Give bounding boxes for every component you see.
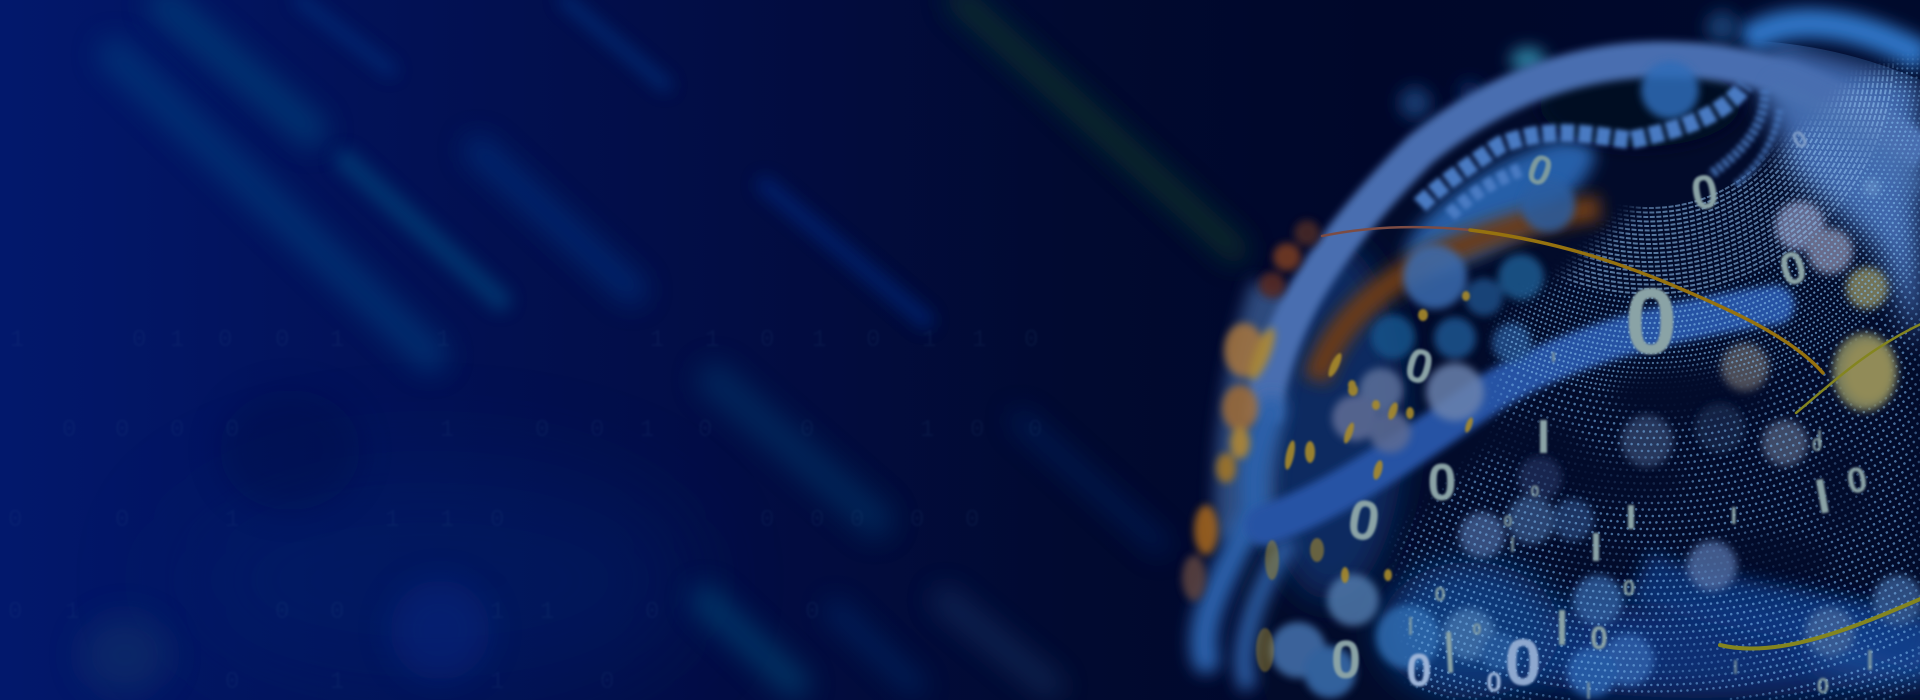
bottom blue band bbox=[1640, 575, 1920, 650]
orange sparks bbox=[1256, 291, 1475, 672]
binary zero digits: 0 bbox=[1812, 435, 1822, 455]
faint binary digits bbox=[8, 327, 1042, 696]
binary one bars bbox=[1409, 352, 1872, 699]
pixel ring near the pole bbox=[1420, 85, 1780, 215]
blue and grey bokeh bbox=[1270, 61, 1920, 698]
binary zero digits: 0 bbox=[1434, 584, 1446, 606]
binary zero digits: 0 bbox=[1687, 165, 1723, 221]
concentric dot rings bbox=[1392, 58, 1920, 700]
binary zero digits: 0 bbox=[1399, 338, 1439, 396]
binary zero digits: 0 bbox=[1787, 125, 1813, 155]
top-right outer band bbox=[1745, 23, 1920, 58]
dotted mid rings bbox=[1489, 58, 1920, 394]
faint binary digits: 0110 bbox=[225, 669, 614, 696]
ring lower inner bbox=[1244, 540, 1290, 688]
gold curved line bbox=[1322, 227, 1823, 373]
faint binary digits: 101001111010110 bbox=[10, 327, 1038, 354]
binary zero digits: 0 bbox=[1590, 620, 1608, 656]
dense upper rings bbox=[1551, 59, 1894, 294]
binary zero digits bbox=[1331, 125, 1870, 699]
faint binary digits: 0000100100100 bbox=[62, 417, 1042, 444]
blue small floating dots bbox=[1399, 11, 1738, 119]
orange bokeh bbox=[1182, 220, 1320, 601]
outer pale ring bbox=[1262, 59, 1920, 420]
faint binary digits: 01001100 bbox=[8, 599, 819, 626]
diagonal light streaks bbox=[115, 0, 1235, 686]
faint binary digits: 00111000000 bbox=[8, 507, 979, 534]
binary zero digits: 0 bbox=[1428, 454, 1456, 512]
orange glow band bbox=[1316, 208, 1600, 380]
big yellow bokeh bbox=[1833, 333, 1897, 411]
binary zero digits: 0 bbox=[1521, 144, 1559, 196]
binary zero digits: 0 bbox=[1817, 674, 1829, 698]
binary zero digits: 0 bbox=[1331, 630, 1361, 690]
binary zero digits: 0 bbox=[1473, 622, 1482, 638]
dotted lower rings bbox=[1392, 271, 1920, 700]
binary zero digits: 0 bbox=[1623, 576, 1635, 600]
green-yellow lines bbox=[1720, 322, 1920, 649]
binary zero digits: 0 bbox=[1343, 486, 1385, 554]
diagonal bright band bbox=[1265, 305, 1775, 525]
binary zero digits: 0 bbox=[1844, 458, 1870, 502]
left haze bbox=[1244, 290, 1280, 540]
binary zero digits: 0 bbox=[1486, 666, 1502, 698]
binary zero digits: 0 bbox=[1504, 514, 1513, 530]
binary zero digits: 0 bbox=[1406, 644, 1432, 696]
binary zero digits: 0 bbox=[1774, 240, 1812, 296]
pale upper-right highlight bbox=[1770, 90, 1920, 190]
globe bbox=[1178, 0, 1920, 700]
ring lower left bbox=[1204, 410, 1272, 660]
globe dark interior bbox=[1237, 40, 1920, 700]
binary zero digits: 0 bbox=[1505, 625, 1541, 699]
binary zero digits: 0 bbox=[1625, 268, 1677, 374]
binary zero digits: 0 bbox=[1531, 484, 1540, 500]
